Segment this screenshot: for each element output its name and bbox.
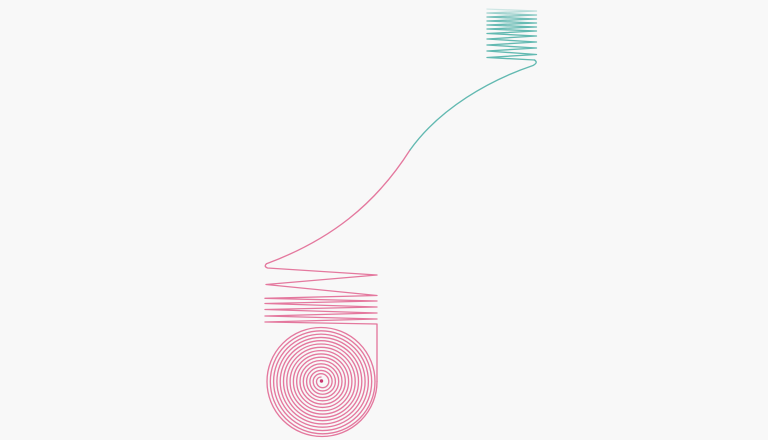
spiral centre dot <box>320 379 323 383</box>
teal curve <box>410 60 536 150</box>
pink spiral <box>267 328 377 436</box>
pink curve <box>266 150 410 264</box>
pink zigzag coil <box>265 264 377 382</box>
teal fading zigzag coil <box>487 9 536 60</box>
